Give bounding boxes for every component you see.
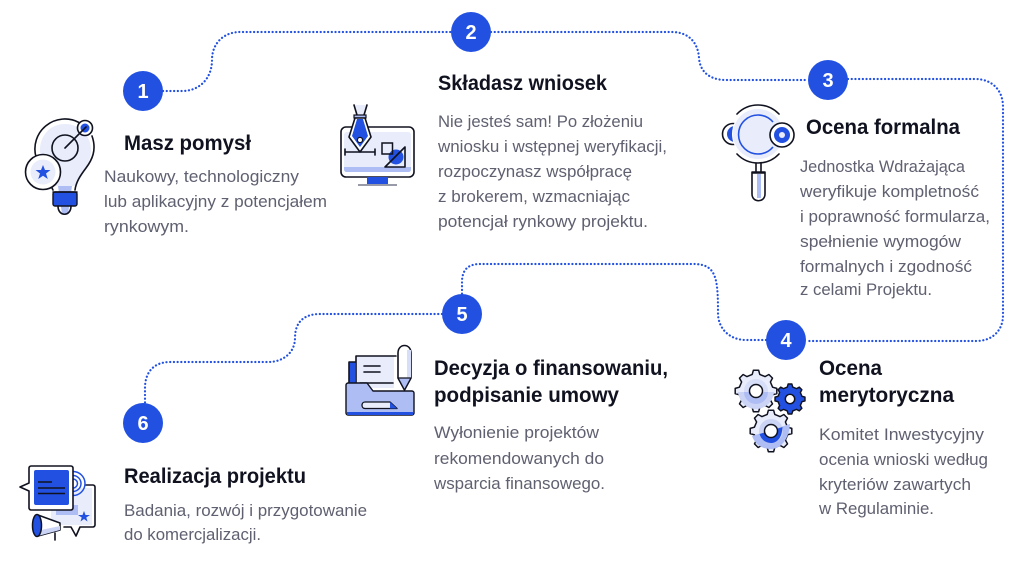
step number 6 — [123, 403, 163, 443]
text: step 4 description — [818, 425, 988, 518]
text: step 3 description — [799, 157, 990, 299]
icon: magnifying glass — [722, 105, 794, 201]
text: step 3 description: i poprawność formularza, — [800, 207, 990, 226]
text: step 2 description: Nie jesteś sam! Po złożeniu — [438, 112, 643, 131]
text: step 5 description: Wyłonienie projektów — [434, 423, 600, 442]
step 4 — [735, 320, 988, 518]
text: step 3 description: weryfikuje kompletność — [799, 182, 979, 201]
step 6 — [20, 403, 367, 544]
text: step 1 description: Naukowy, technologiczny — [104, 167, 300, 186]
step number 3: 3 — [822, 70, 834, 92]
text: step 1 description: lub aplikacyjny z potencjałem — [104, 192, 327, 211]
text: step 6 description — [124, 501, 367, 544]
text: step 5 description: wsparcia finansowego. — [433, 474, 605, 493]
step number 4: 4 — [780, 330, 792, 352]
step 1 — [26, 71, 327, 236]
text: step 3 description: spełnienie wymogów — [800, 232, 962, 251]
text: step 3 description: formalnych i zgodność — [800, 257, 973, 276]
step 5 — [346, 294, 668, 493]
step number 5 — [442, 294, 482, 334]
step number 1 — [123, 71, 163, 111]
step number 4 — [766, 320, 806, 360]
step number 5: 5 — [456, 304, 468, 326]
text: step 3 description: z celami Projektu. — [800, 280, 932, 299]
text: step 5 description — [433, 423, 605, 493]
heading: Masz pomysł: Masz pomysł — [124, 132, 251, 155]
text: step 2 description: potencjał rynkowy projektu. — [438, 212, 648, 231]
icon: folder with documents — [346, 346, 414, 415]
heading: Decyzja o finansowaniu, podpisanie umowy — [434, 357, 668, 407]
dotted connector path — [145, 32, 1003, 403]
text: step 6 description: do komercjalizacji. — [124, 525, 261, 544]
step number 1: 1 — [137, 81, 149, 103]
heading: Ocena merytoryczna — [819, 357, 954, 407]
text: step 4 description: w Regulaminie. — [818, 499, 934, 518]
text: step 2 description: rozpoczynasz współpracę — [438, 162, 632, 181]
step 3 — [722, 60, 990, 299]
text: step 2 description: z brokerem, wzmacniając — [438, 187, 631, 206]
heading: Ocena merytoryczna: Ocena — [819, 357, 882, 380]
heading: Realizacja projektu: Realizacja projektu — [124, 465, 306, 488]
icon: light bulb — [26, 119, 94, 214]
heading: Ocena merytoryczna: merytoryczna — [819, 384, 954, 407]
step number 2 — [451, 12, 491, 52]
text: step 6 description: Badania, rozwój i przygotowanie — [124, 501, 367, 520]
text: step 3 description: Jednostka Wdrażająca — [800, 157, 966, 176]
heading: Decyzja o finansowaniu, podpisanie umowy: Decyzja o finansowaniu, — [434, 357, 668, 380]
step number 3 — [808, 60, 848, 100]
heading: Ocena formalna: Ocena formalna — [806, 116, 960, 139]
heading: Decyzja o finansowaniu, podpisanie umowy: podpisanie umowy — [434, 384, 619, 407]
step number 6: 6 — [137, 413, 149, 435]
step number 2: 2 — [465, 22, 477, 44]
text: step 4 description: ocenia wnioski według — [819, 450, 988, 469]
text: step 5 description: rekomendowanych do — [434, 449, 604, 468]
text: step 2 description — [437, 112, 667, 231]
text: step 2 description: wniosku i wstępnej weryfikacji, — [437, 137, 667, 156]
text: step 1 description: rynkowym. — [104, 217, 189, 236]
heading: Składasz wniosek: Składasz wniosek — [438, 72, 607, 95]
icon: gears — [735, 370, 805, 452]
text: step 4 description: Komitet Inwestycyjny — [819, 425, 985, 444]
icon: monitor with pen nib — [341, 105, 414, 185]
icon: speech bubbles and megaphone — [20, 466, 95, 540]
step 2 — [341, 12, 667, 231]
text: step 4 description: kryteriów zawartych — [819, 475, 971, 494]
text: step 1 description — [104, 167, 327, 236]
